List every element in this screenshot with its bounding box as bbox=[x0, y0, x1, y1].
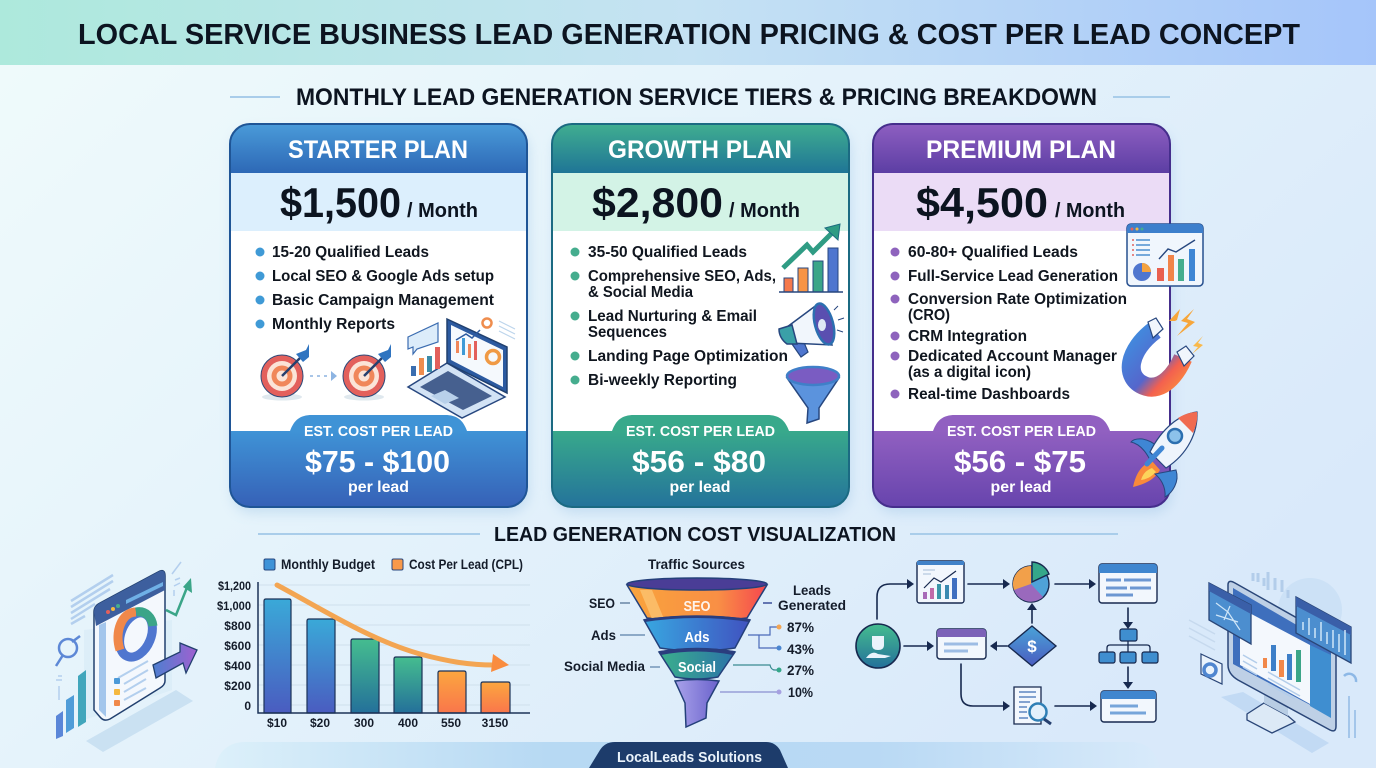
price: premium bbox=[916, 179, 1125, 226]
cost per lead: growth: per lead bbox=[670, 479, 730, 496]
icon: magnet bbox=[1131, 309, 1203, 387]
cost per lead: premium: EST. COST PER LEAD bbox=[947, 423, 1096, 440]
funnel body: Social bbox=[678, 660, 716, 676]
feature list: growth: Sequences bbox=[588, 324, 667, 341]
cost per lead: growth: $56 - $80 bbox=[632, 444, 766, 479]
feature list: growth: Lead Nurturing & Email bbox=[588, 308, 757, 325]
y axis labels: $600 bbox=[224, 639, 251, 653]
node: lead icon circle bbox=[856, 624, 900, 668]
node: window card middle bbox=[937, 629, 986, 659]
left source labels: Ads bbox=[591, 628, 616, 643]
icon: target after bbox=[343, 344, 391, 400]
price: starter: $1,500 bbox=[280, 179, 401, 226]
price: growth bbox=[592, 179, 800, 226]
x axis labels: 550 bbox=[441, 716, 461, 730]
plan name: starter: STARTER PLAN bbox=[288, 136, 468, 164]
feature list: premium: Conversion Rate Optimization bbox=[908, 291, 1127, 308]
cost per lead: starter bbox=[304, 423, 453, 496]
cost per lead: growth bbox=[626, 423, 775, 496]
feature list: premium: Real-time Dashboards bbox=[908, 386, 1070, 403]
cost per lead: premium bbox=[947, 423, 1096, 496]
funnel body bbox=[627, 578, 767, 727]
feature list: starter bbox=[256, 244, 495, 333]
feature list: growth bbox=[570, 244, 788, 389]
icon: analytics dashboard window bbox=[1127, 224, 1203, 286]
panel: growth plan bbox=[552, 124, 851, 513]
price: growth: / Month bbox=[729, 200, 800, 222]
icon: megaphone bbox=[779, 301, 844, 357]
floating panel left bbox=[1209, 583, 1251, 644]
cost per lead: starter: $75 - $100 bbox=[305, 444, 450, 479]
right lead percentages bbox=[720, 583, 846, 700]
cost per lead: starter: EST. COST PER LEAD bbox=[304, 423, 453, 440]
node: chart card bbox=[917, 561, 964, 603]
icon: target before bbox=[261, 344, 309, 400]
floating panel right bbox=[1296, 597, 1351, 663]
feature list: growth: Comprehensive SEO, Ads, bbox=[588, 268, 776, 285]
footer band bbox=[215, 742, 1160, 768]
cost per lead: premium: per lead bbox=[990, 479, 1052, 496]
y axis labels: $200 bbox=[224, 679, 251, 693]
x axis labels: $10 bbox=[267, 716, 287, 730]
feature list: growth: Bi-weekly Reporting bbox=[588, 372, 737, 389]
node: window card top right bbox=[1099, 564, 1157, 603]
panel: premium plan bbox=[873, 124, 1203, 513]
x axis labels: $20 bbox=[310, 716, 330, 730]
chart legend bbox=[264, 557, 523, 572]
feature list: starter: Monthly Reports bbox=[272, 316, 395, 333]
brand tab bbox=[589, 742, 788, 768]
right lead percentages: 43% bbox=[787, 642, 814, 657]
node: pie chart bbox=[1013, 562, 1049, 602]
node: window card bottom right bbox=[1101, 691, 1156, 722]
feature list: growth: & Social Media bbox=[588, 284, 693, 301]
feature list: premium: (as a digital icon) bbox=[908, 364, 1031, 381]
funnel chart: traffic sources to leads: Traffic Sources bbox=[648, 557, 745, 572]
price: growth: $2,800 bbox=[592, 179, 723, 226]
x axis labels: 400 bbox=[398, 716, 418, 730]
y axis labels: $400 bbox=[224, 659, 251, 673]
funnel body: SEO bbox=[684, 599, 710, 615]
icon: funnel bbox=[787, 367, 839, 423]
feature list: premium: (CRO) bbox=[908, 307, 950, 324]
left source labels bbox=[564, 596, 660, 674]
price: premium: $4,500 bbox=[916, 179, 1048, 226]
right lead percentages: 87% bbox=[787, 620, 814, 635]
right lead percentages: Leads bbox=[793, 583, 831, 598]
funnel chart: traffic sources to leads bbox=[564, 557, 846, 727]
node: document with magnifier bbox=[1014, 687, 1051, 724]
plan name: growth: GROWTH PLAN bbox=[608, 136, 792, 164]
brand tab: LocalLeads Solutions bbox=[617, 750, 762, 766]
node: dollar diamond bbox=[1008, 626, 1056, 666]
chart legend: Cost Per Lead (CPL) bbox=[409, 557, 523, 572]
arrow: declining cost trend bbox=[277, 585, 509, 672]
left source labels: SEO bbox=[589, 596, 615, 611]
feature list: premium bbox=[890, 244, 1127, 403]
section heading: cost visualization: LEAD GENERATION COST VISUALIZATION bbox=[494, 524, 896, 546]
flow diagram: lead generation process bbox=[856, 561, 1158, 724]
node: org hierarchy bbox=[1099, 629, 1158, 663]
panel: starter plan bbox=[230, 124, 529, 513]
feature list: premium: 60-80+ Qualified Leads bbox=[908, 244, 1078, 261]
price: premium: / Month bbox=[1055, 200, 1125, 222]
cost per lead: growth: EST. COST PER LEAD bbox=[626, 423, 775, 440]
right lead percentages: 27% bbox=[787, 663, 814, 678]
plan name: premium: PREMIUM PLAN bbox=[926, 136, 1116, 164]
illustration: isometric tablet analytics bbox=[56, 562, 197, 752]
feature list: premium: Dedicated Account Manager bbox=[908, 348, 1117, 365]
y axis labels: $800 bbox=[224, 619, 251, 633]
y axis labels: $1,200 bbox=[218, 579, 251, 593]
bar chart: monthly budget vs cost per lead bbox=[217, 557, 530, 730]
icon: laptop with dashboard bbox=[408, 318, 515, 418]
y axis labels: $1,000 bbox=[217, 599, 251, 613]
feature list: starter: Local SEO & Google Ads setup bbox=[272, 268, 494, 285]
x axis labels: 300 bbox=[354, 716, 374, 730]
bars bbox=[264, 599, 510, 713]
small donut card bbox=[1201, 654, 1222, 684]
cost per lead: premium: $56 - $75 bbox=[954, 444, 1086, 479]
feature list: starter: Basic Campaign Management bbox=[272, 292, 495, 309]
title banner: LOCAL SERVICE BUSINESS LEAD GENERATION PRICING & COST PER LEAD CONCEPT bbox=[78, 19, 1300, 51]
price: starter bbox=[280, 179, 478, 226]
price: starter: / Month bbox=[407, 200, 478, 222]
x axis labels bbox=[267, 716, 509, 730]
icon: rocket bbox=[1131, 412, 1197, 497]
right lead percentages: Generated bbox=[778, 598, 846, 613]
title banner bbox=[0, 0, 1376, 65]
icon: growth bar chart bbox=[779, 224, 843, 292]
feature list: premium: Full-Service Lead Generation bbox=[908, 268, 1118, 285]
cost per lead: starter: per lead bbox=[348, 479, 409, 496]
y axis labels bbox=[217, 579, 251, 713]
right lead percentages: 10% bbox=[788, 685, 813, 700]
funnel body: Ads bbox=[684, 630, 710, 646]
chart legend: Monthly Budget bbox=[281, 557, 375, 572]
x axis labels: 3150 bbox=[482, 716, 509, 730]
y axis labels: 0 bbox=[244, 699, 251, 713]
section heading: service tiers: MONTHLY LEAD GENERATION SERVICE TIERS & PRICING BREAKDOWN bbox=[296, 84, 1097, 111]
feature list: growth: 35-50 Qualified Leads bbox=[588, 244, 747, 261]
flow arrows bbox=[877, 584, 1128, 706]
arrow: dotted progress bbox=[310, 371, 337, 381]
feature list: growth: Landing Page Optimization bbox=[588, 348, 788, 365]
feature list: premium: CRM Integration bbox=[908, 328, 1027, 345]
node: dollar diamond: $ bbox=[1027, 637, 1037, 656]
feature list: starter: 15-20 Qualified Leads bbox=[272, 244, 429, 261]
illustration: isometric monitor dashboard bbox=[1189, 572, 1356, 753]
left source labels: Social Media bbox=[564, 659, 645, 674]
